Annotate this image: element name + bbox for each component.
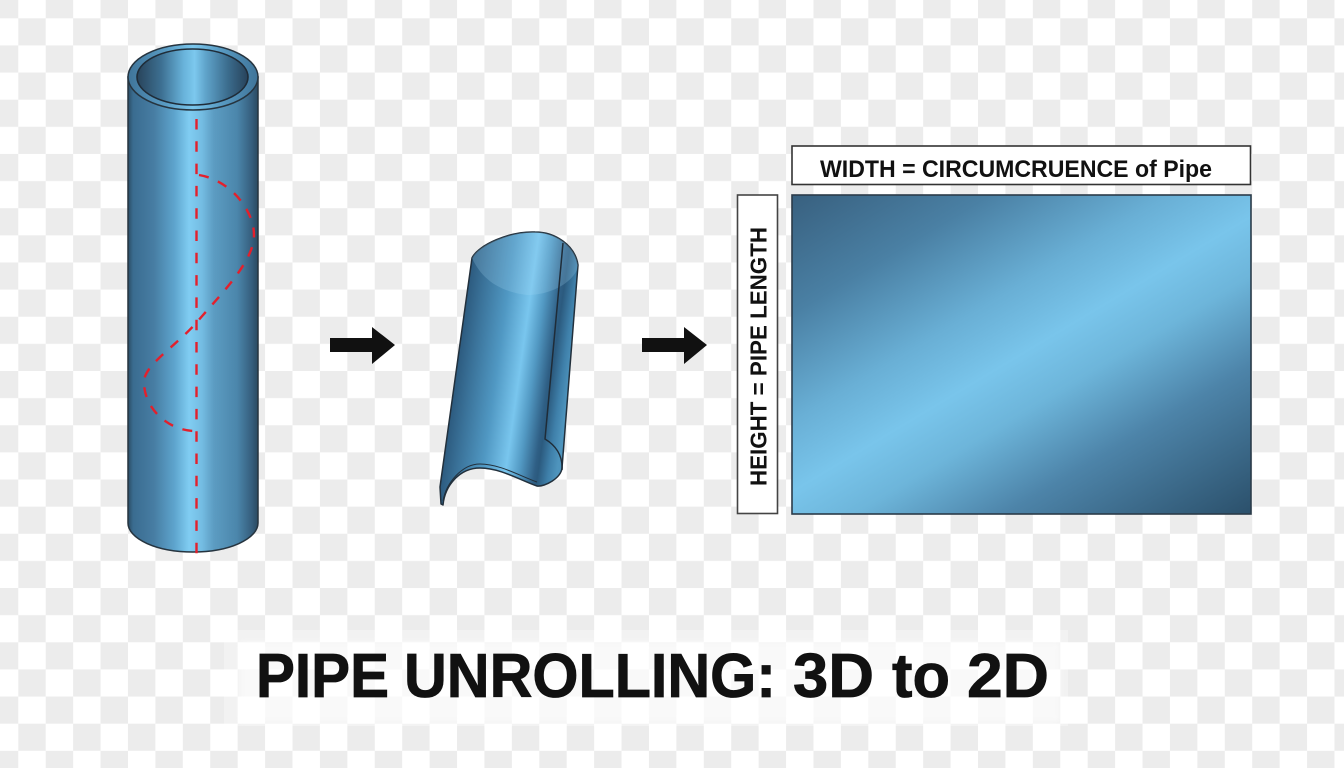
title: 3D [793, 642, 874, 711]
pipe top rim [128, 44, 258, 110]
flat unrolled rectangle [792, 195, 1251, 514]
label box: height [738, 195, 778, 514]
arrow: pipe to partly unrolled [330, 327, 395, 364]
title: UNROLLING: [404, 642, 776, 711]
icon: 3D pipe with cut line [128, 44, 258, 555]
title [256, 642, 1049, 711]
height label text: HEIGHT = PIPE LENGTH [746, 227, 772, 486]
width label text: WIDTH = CIRCUMCRUENCE of Pipe [820, 156, 1212, 183]
lower lip of sheet [443, 464, 537, 501]
curved sheet [440, 232, 578, 505]
icon: partly unrolled pipe [440, 232, 578, 505]
title: PIPE [256, 642, 389, 711]
pipe inner opening [137, 49, 248, 105]
red spiral cut line [144, 175, 254, 431]
red straight cut line [195, 119, 198, 555]
title: 2D [967, 642, 1049, 711]
arrow: partly unrolled to flat sheet [642, 327, 707, 364]
pipe body [128, 77, 258, 552]
visible interior at top [472, 232, 578, 295]
title: to [892, 642, 950, 711]
seam edge of flap [545, 243, 563, 470]
label box: width [792, 146, 1250, 184]
